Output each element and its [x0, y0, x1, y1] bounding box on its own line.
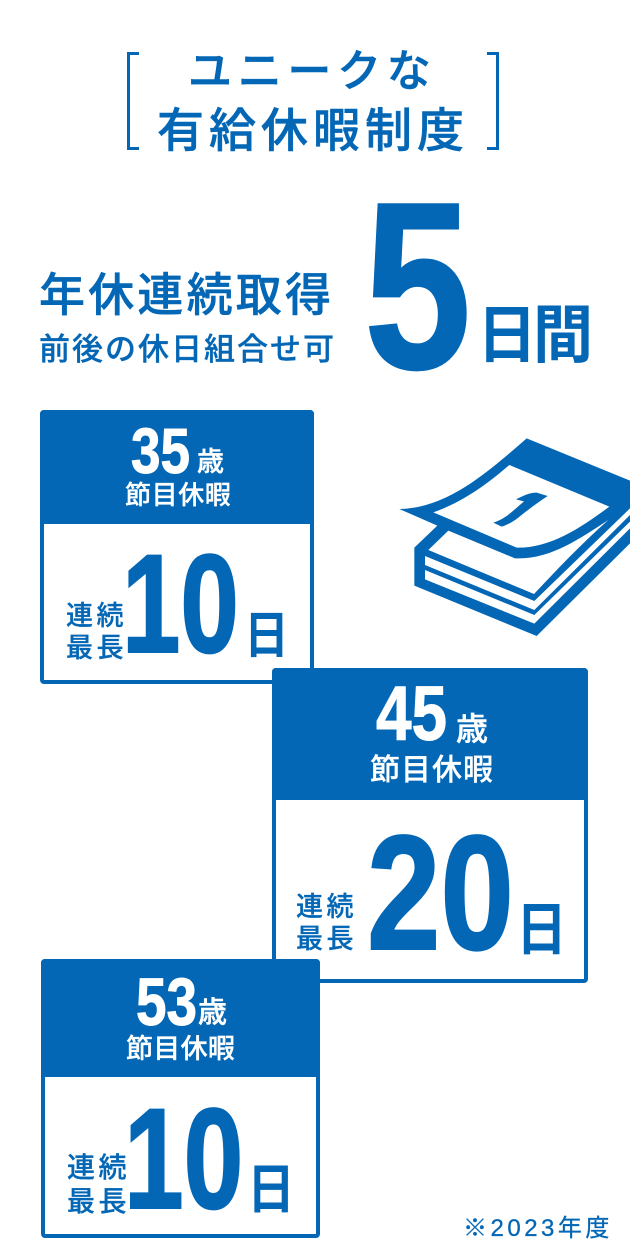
日間: 日間	[477, 300, 589, 371]
card: age 35	[40, 410, 314, 684]
subheading: 前後の休日組合せ可	[39, 332, 336, 367]
歳: 歳	[198, 997, 227, 1029]
title line 1: ユニークな	[188, 47, 436, 96]
title	[127, 47, 499, 157]
card 35 header	[40, 410, 314, 524]
card 35 label: 連続	[66, 601, 127, 631]
right bracket	[487, 52, 499, 150]
card 45 label: 最長	[296, 924, 357, 954]
left bracket	[127, 52, 139, 150]
歳: 歳	[456, 711, 488, 747]
節目休暇: 節目休暇	[370, 754, 494, 787]
節目休暇: 節目休暇	[125, 480, 231, 510]
card 35 label	[66, 601, 127, 663]
card 53 label	[67, 1152, 130, 1217]
card 53 label: 最長	[67, 1186, 130, 1217]
title line 2: 有給休暇制度	[157, 104, 469, 157]
card 45 label	[296, 892, 357, 954]
heading: consecutive leave: 年休連続取得	[39, 269, 334, 321]
card 35 number 10: 10	[122, 525, 239, 682]
歳: 歳	[197, 447, 224, 477]
icon: calendar	[400, 438, 630, 636]
card 35 label: 最長	[66, 633, 127, 663]
footnote: ※2023年度	[463, 1215, 613, 1242]
age 53: 53	[136, 965, 197, 1040]
card 45 label: 連続	[296, 892, 357, 922]
card: age 45	[272, 668, 588, 983]
card 35 日: 日	[244, 607, 289, 664]
card 53 日: 日	[247, 1160, 295, 1220]
big number 5: 5	[364, 154, 471, 419]
card 45 日: 日	[516, 897, 567, 962]
card: age 53	[41, 959, 320, 1238]
card 53 label: 連続	[67, 1152, 130, 1183]
card 53 number 10: 10	[124, 1080, 243, 1239]
age 35: 35	[131, 415, 190, 487]
age 45: 45	[376, 671, 447, 757]
card 53 header	[41, 959, 320, 1077]
card 45 number 20: 20	[367, 801, 514, 984]
節目休暇: 節目休暇	[126, 1034, 235, 1064]
card 45 header	[272, 668, 588, 800]
